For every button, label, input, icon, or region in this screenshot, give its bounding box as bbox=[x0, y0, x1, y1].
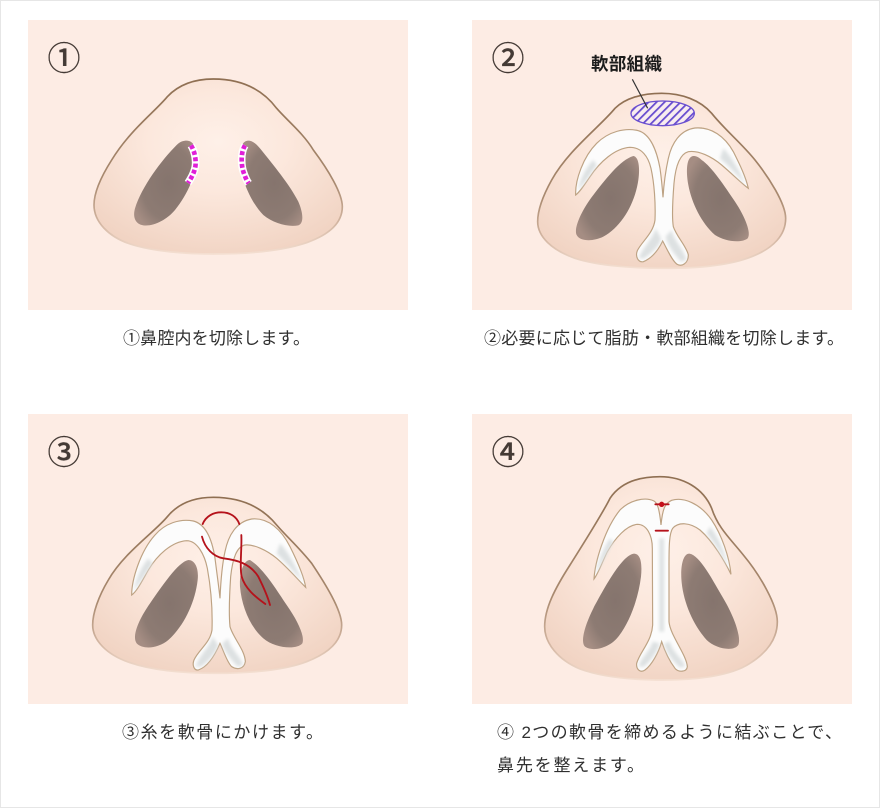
leader line bbox=[632, 79, 648, 108]
nose illustration 3 bbox=[93, 497, 342, 673]
caption 4 bbox=[497, 723, 842, 775]
suture knot bbox=[655, 502, 669, 531]
panel 2: soft tissue bbox=[472, 20, 852, 310]
caption 2: ②必要に応じて脂肪・軟部組織を切除します。 bbox=[484, 329, 844, 348]
nose illustration 4 bbox=[545, 477, 777, 680]
label: soft tissue: 軟部組織 bbox=[591, 54, 662, 74]
panel 3: thread bbox=[28, 414, 408, 704]
step number 3: ③ bbox=[48, 434, 80, 471]
step number 1: ① bbox=[48, 40, 80, 77]
caption 3: ③糸を軟骨にかけます。 bbox=[122, 723, 323, 742]
nose illustration 2 bbox=[538, 79, 786, 268]
panel 4: tie bbox=[472, 414, 852, 704]
caption 4: 鼻先を整えます。 bbox=[497, 756, 644, 775]
caption 4: ④ 2つの軟骨を締めるように結ぶことで、 bbox=[497, 723, 842, 742]
panel 1: incision bbox=[28, 20, 408, 310]
nose illustration 1 bbox=[94, 79, 342, 254]
thread bbox=[202, 512, 270, 605]
step number 4: ④ bbox=[492, 434, 524, 471]
caption 1: ①鼻腔内を切除します。 bbox=[123, 329, 310, 348]
soft tissue hatched ellipse bbox=[631, 101, 694, 126]
step number 2: ② bbox=[492, 40, 524, 77]
